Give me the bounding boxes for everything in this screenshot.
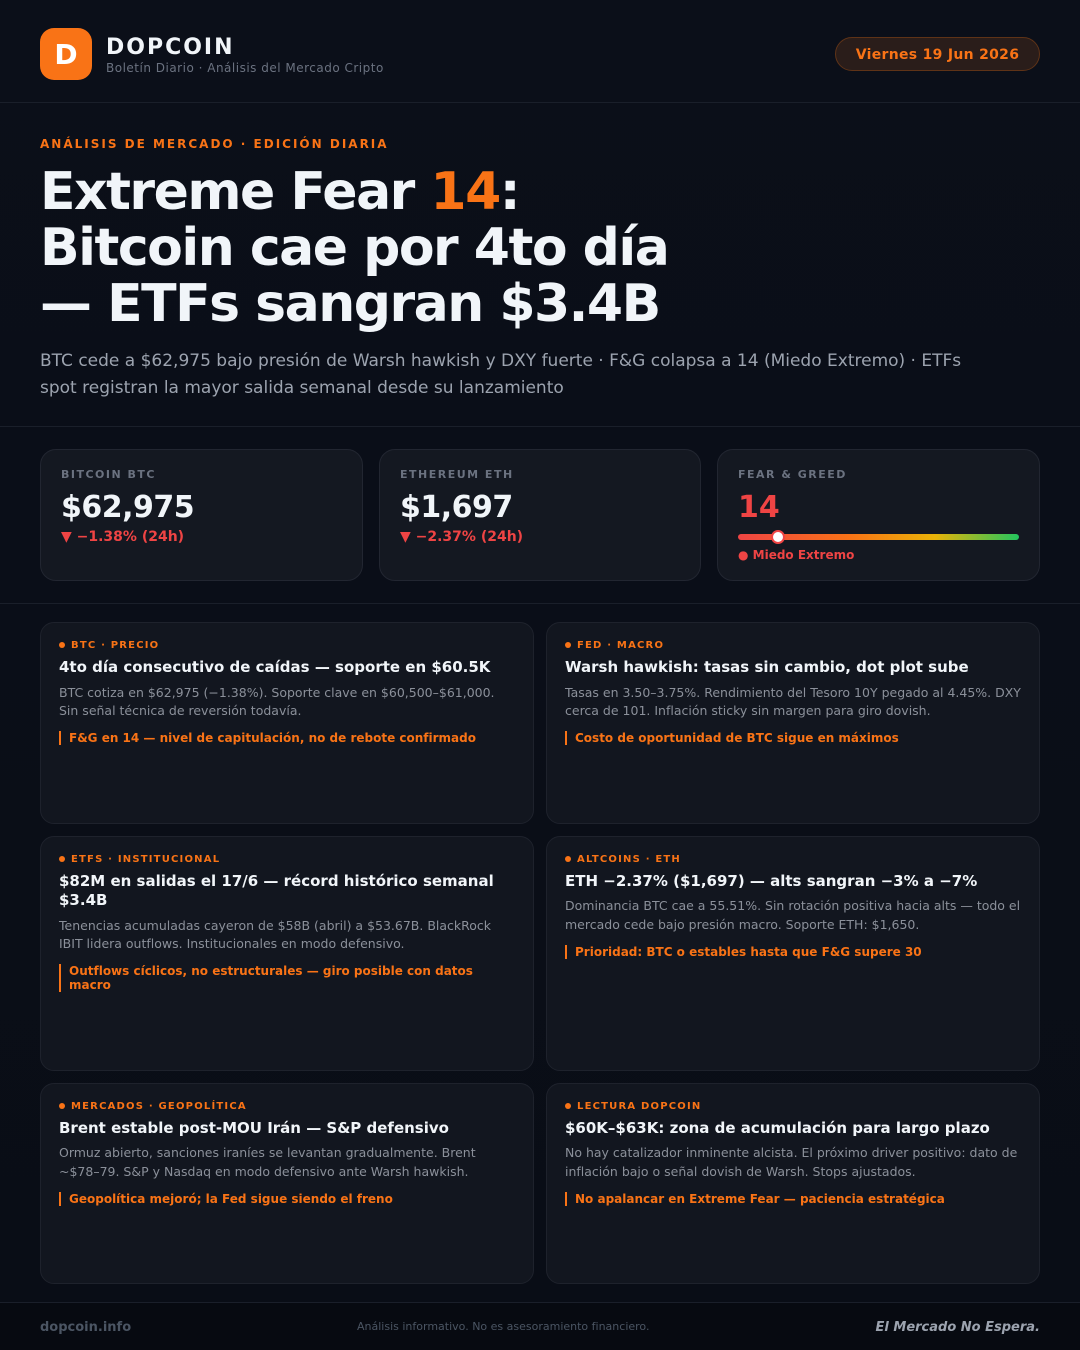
panel: Altcoins ETH news: Dominancia BTC cae a 55.51%. Sin rotación positiva hacia alts — todo el mercado cede bajo presión macro. Soporte ETH: $1,650. — [565, 898, 1020, 932]
panel: Altcoins ETH news: Prioridad: BTC o estables hasta que F&G supere 30 — [575, 945, 922, 959]
panel: ETF institutional news: ETFS · INSTITUCIONAL — [71, 854, 220, 865]
panel: Ethereum price: ▼ −2.37% (24h) — [400, 529, 523, 545]
panel: Fed macro news: Costo de oportunidad de BTC sigue en máximos — [575, 731, 899, 745]
panel: ETF institutional news: $82M en salidas el 17/6 — récord histórico semanal $3.4B — [59, 872, 494, 909]
panel: Markets geopolitics news: Ormuz abierto, sanciones iraníes se levantan gradualmente. Brent ~$78–79. S&P y Nasdaq en modo defensivo ante Warsh hawkish. — [59, 1145, 476, 1179]
hero section — [40, 136, 961, 398]
panel: Markets geopolitics news: Brent estable post-MOU Irán — S&P defensivo — [59, 1119, 449, 1137]
panel: Altcoins ETH news: ETH −2.37% ($1,697) — alts sangran −3% a −7% — [565, 872, 977, 890]
fear and greed gauge — [738, 534, 1019, 540]
hero summary — [40, 351, 961, 398]
hero summary: spot registran la mayor salida semanal desde su lanzamiento — [40, 378, 564, 398]
footer — [0, 1302, 1080, 1350]
header: brand and date — [40, 28, 1040, 80]
panel: Markets geopolitics news: MERCADOS · GEOPOLÍTICA — [71, 1101, 247, 1112]
icon: Dopcoin logo: D — [54, 38, 78, 71]
date badge — [835, 37, 1040, 71]
panel: Fed macro news — [546, 622, 1040, 824]
panel: ETF institutional news: Tenencias acumuladas cayeron de $58B (abril) a $53.67B. BlackRock IBIT lidera outflows. Institucionales en modo defensivo. — [59, 918, 491, 951]
panel: Fed macro news: Warsh hawkish: tasas sin cambio, dot plot sube — [565, 658, 969, 676]
panel: Fear and Greed: 14 — [738, 490, 780, 525]
panel: ETF institutional news — [40, 836, 534, 1071]
panel: BTC price news: 4to día consecutivo de caídas — soporte en $60.5K — [59, 658, 490, 676]
icon: Dopcoin logo — [40, 28, 92, 80]
date badge: Viernes 19 Jun 2026 — [856, 47, 1019, 63]
panel: Ethereum price — [379, 449, 701, 581]
footer slogan: El Mercado No Espera. — [876, 1320, 1040, 1335]
panel: Altcoins ETH news: ALTCOINS · ETH — [577, 854, 681, 865]
panel: Markets geopolitics news — [40, 1083, 534, 1284]
panel: Dopcoin reading: No apalancar en Extreme Fear — paciencia estratégica — [575, 1192, 945, 1206]
hero summary: BTC cede a $62,975 bajo presión de Warsh hawkish y DXY fuerte · F&G colapsa a 14 (Miedo Extremo) · ETFs — [40, 351, 961, 371]
panel: Ethereum price: $1,697 — [400, 490, 513, 525]
panel: Fear and Greed — [717, 449, 1040, 581]
footer disclaimer: Análisis informativo. No es asesoramiento financiero. — [357, 1320, 649, 1333]
panel: Dopcoin reading — [546, 1083, 1040, 1284]
panel: ETF institutional news: Outflows cíclicos, no estructurales — giro posible con datos macro — [69, 964, 473, 992]
panel: BTC price news — [40, 622, 534, 824]
panel: Fear and Greed: FEAR & GREED — [738, 468, 847, 481]
main headline: Bitcoin cae por 4to día — [40, 218, 668, 278]
panel: Altcoins ETH news — [546, 836, 1040, 1071]
panel: Fed macro news: Tasas en 3.50–3.75%. Rendimiento del Tesoro 10Y pegado al 4.45%. DXY cerca de 101. Inflación sticky sin margen para giro dovish. — [565, 685, 1021, 718]
panel: Markets geopolitics news: Geopolítica mejoró; la Fed sigue siendo el freno — [69, 1192, 393, 1206]
panel: Fed macro news: FED · MACRO — [577, 640, 664, 651]
main headline — [40, 162, 668, 334]
panel: Ethereum price: ETHEREUM ETH — [400, 468, 514, 481]
brand subtitle: Boletín Diario · Análisis del Mercado Cripto — [106, 61, 384, 75]
main headline: Extreme Fear 14: — [40, 162, 519, 222]
panel: BTC price news: BTC cotiza en $62,975 (−1.38%). Soporte clave en $60,500–$61,000. Sin señal técnica de reversión todavía. — [59, 685, 495, 718]
panel: BTC price news: F&G en 14 — nivel de capitulación, no de rebote confirmado — [69, 731, 476, 745]
brand name: DOPCOIN — [106, 35, 235, 60]
panel: BTC price news: BTC · PRECIO — [71, 640, 159, 651]
panel: Dopcoin reading: $60K–$63K: zona de acumulación para largo plazo — [565, 1119, 990, 1137]
panel: Bitcoin price: ▼ −1.38% (24h) — [61, 529, 184, 545]
panel: Bitcoin price: $62,975 — [61, 490, 194, 525]
panel: Dopcoin reading: LECTURA DOPCOIN — [577, 1101, 701, 1112]
panel: Bitcoin price — [40, 449, 363, 581]
panel: Dopcoin reading: No hay catalizador inminente alcista. El próximo driver positivo: dato de inflación bajo o señal dovish de Warsh. Stops ajustados. — [565, 1145, 1017, 1179]
footer site link: dopcoin.info — [40, 1320, 131, 1335]
eyebrow: ANÁLISIS DE MERCADO · EDICIÓN DIARIA — [40, 137, 389, 151]
gauge label: ● Miedo Extremo — [738, 548, 854, 562]
panel: Bitcoin price: BITCOIN BTC — [61, 468, 156, 481]
main headline: — ETFs sangran $3.4B — [40, 274, 660, 334]
